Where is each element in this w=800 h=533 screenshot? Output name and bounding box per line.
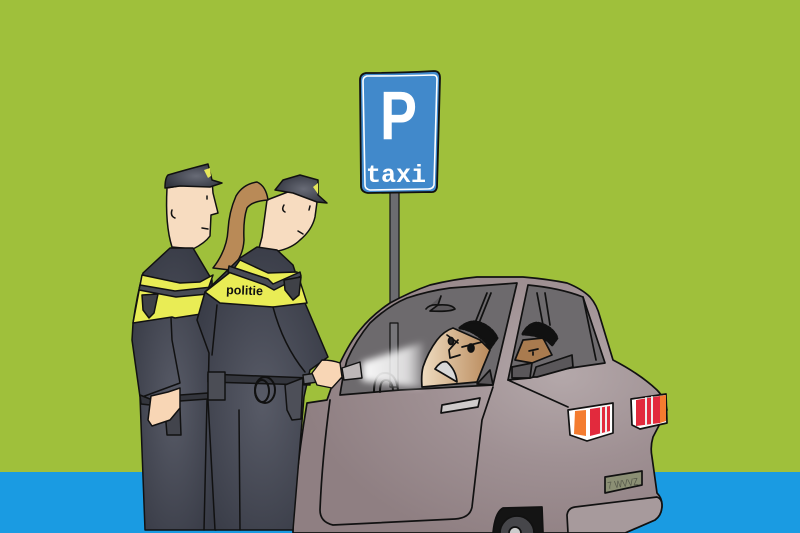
lens dividers: [646, 397, 652, 425]
officer 2 belt: [208, 374, 310, 385]
officer 1 shoulder patch: [142, 294, 158, 318]
flashlight and hand: [303, 360, 362, 388]
belt handcuffs: [255, 377, 275, 403]
hub: [509, 527, 521, 533]
officer 1: male: [132, 164, 222, 530]
driver eyes and brows: [447, 335, 482, 358]
rear window: [508, 285, 605, 380]
officer 1 arm line: [142, 318, 180, 397]
officer 2 uniform text: politie: [226, 283, 263, 298]
bumper: [567, 497, 662, 533]
plate text: 7 WVVZ: [607, 477, 639, 492]
taxi car: [293, 277, 667, 533]
driver hair: [460, 322, 497, 348]
orange lens: [660, 395, 666, 423]
officer 2 holster: [285, 378, 303, 420]
door handle: [441, 398, 480, 413]
officer 2 shoulder patch: [284, 277, 301, 300]
front window: [340, 283, 517, 395]
flashlight beam: [362, 342, 423, 388]
steering wheel: [374, 373, 398, 392]
left tail light: [568, 403, 613, 441]
driver eye right: [468, 344, 474, 352]
driver seat: [477, 370, 493, 385]
right tail light: [631, 394, 667, 429]
officer 2 legs and body: [197, 247, 328, 530]
wheel arch: [493, 507, 543, 533]
driver head: [422, 328, 490, 387]
officer 2: female with ponytail: [197, 175, 328, 530]
officer 1 hand: [148, 388, 180, 426]
lens dividers: [601, 406, 606, 433]
passenger hair: [523, 323, 557, 345]
passenger face marks: [529, 349, 538, 355]
officer 2 cap badge: [313, 183, 318, 194]
officer 1 legs and body: [132, 248, 216, 530]
tyre: [500, 516, 534, 533]
flashlight head: [342, 362, 362, 380]
red lens: [590, 406, 610, 436]
hand: [312, 360, 342, 388]
blue ground strip: [0, 472, 800, 533]
car body: [293, 277, 667, 533]
passenger head: [515, 338, 552, 363]
driver mouth with teeth: [435, 362, 457, 382]
flashlight handle: [303, 369, 344, 384]
ponytail: [213, 182, 268, 270]
front seat back: [533, 355, 573, 377]
driver eye left: [448, 338, 454, 344]
officer 1 head: [167, 180, 218, 249]
orange lens: [574, 410, 586, 436]
rear body crease: [508, 380, 568, 407]
door pillar lines: [475, 293, 596, 360]
sign inner border: [363, 75, 437, 190]
belt pouch: [208, 372, 225, 400]
officer 1 dark stripe: [139, 285, 212, 297]
officer 1 cap badge: [204, 168, 211, 178]
officer 1 yellow band: [133, 275, 213, 323]
officer 1 belt: [140, 393, 208, 405]
officer 2 arm and leg lines: [204, 305, 305, 530]
officer 2 yellow band: [205, 260, 307, 307]
officer 1 cap: [165, 164, 222, 188]
sign post through window: [390, 323, 398, 387]
rear mirror: [426, 296, 455, 311]
red lens: [636, 396, 660, 426]
parking sign with post: [360, 71, 440, 306]
sign word taxi: taxi: [366, 161, 426, 190]
sign post: [390, 190, 399, 306]
door outline: [320, 387, 493, 525]
officer 1 holster: [165, 408, 181, 435]
officer 2 head: [259, 190, 318, 251]
officer 2 cap: [275, 175, 327, 203]
officer 2 dark stripe: [228, 266, 301, 290]
sign plate: [360, 71, 440, 193]
officer 2 face marks: [283, 205, 310, 234]
licence plate: [605, 471, 642, 493]
sign letter P: P: [380, 77, 417, 154]
officer 1 face marks: [171, 196, 208, 229]
rear seats: [512, 363, 532, 378]
